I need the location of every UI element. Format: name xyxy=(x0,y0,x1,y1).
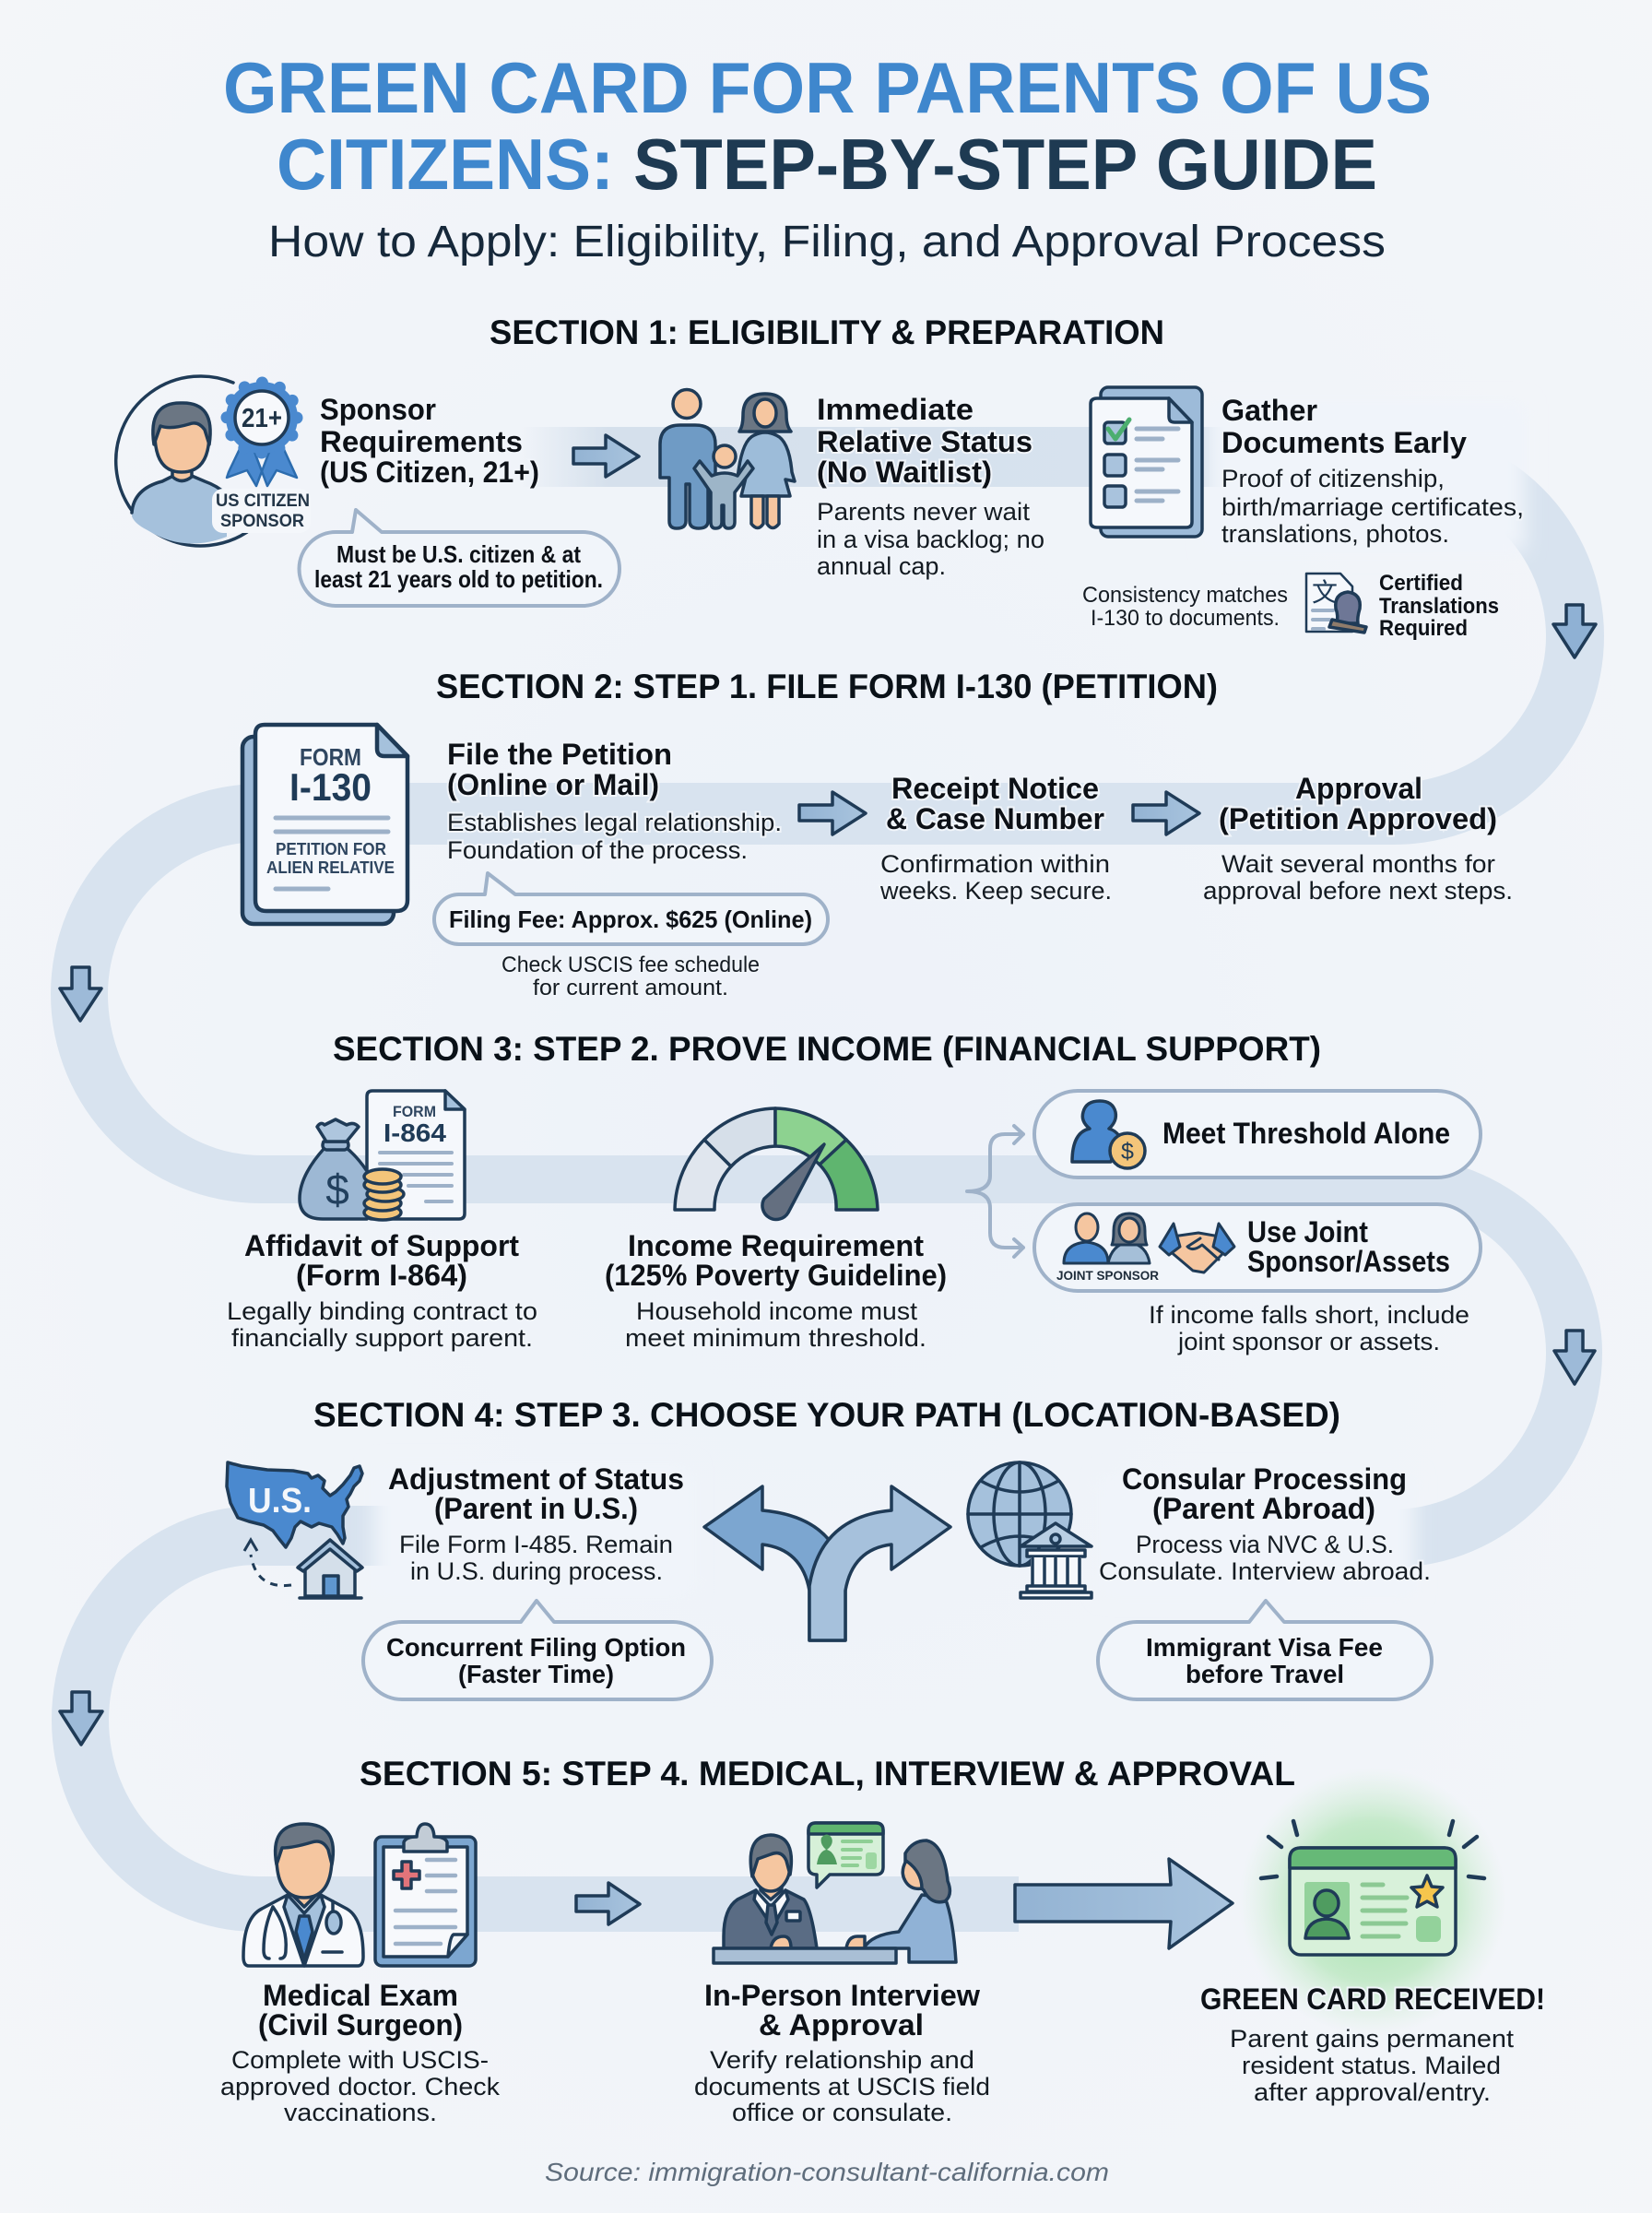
text: consular processing xyxy=(1122,1462,1407,1525)
callout: immigrant visa fee: Immigrant Visa Fee xyxy=(1146,1633,1383,1662)
text: file the petition: (Online or Mail) xyxy=(447,768,659,801)
text: file I-485 xyxy=(399,1531,673,1585)
pill: meet threshold alone: Meet Threshold Alone xyxy=(1162,1117,1450,1150)
text: gather documents xyxy=(1221,394,1467,459)
text: gather documents: Documents Early xyxy=(1221,426,1467,459)
text: certified translations: Required xyxy=(1379,616,1468,641)
text: documents list: birth/marriage certificates, xyxy=(1221,493,1524,521)
icon: US citizen sponsor xyxy=(116,376,298,546)
winding ribbon path xyxy=(51,404,1604,1932)
callout: filing fee xyxy=(434,873,828,944)
checklist lines xyxy=(1137,429,1178,501)
arrow: down left xyxy=(60,1692,102,1745)
text: file the petition: File the Petition xyxy=(447,738,672,771)
text: certified translations: Certified xyxy=(1379,571,1463,596)
pill: joint sponsor xyxy=(1034,1204,1481,1291)
text: binding contract: financially support parent. xyxy=(231,1324,533,1352)
callout: concurrent filing xyxy=(363,1601,712,1699)
icon: medical clipboard xyxy=(375,1824,476,1966)
text: adjustment of status: Adjustment of Status xyxy=(388,1462,684,1496)
icon: form I-864: I-864 xyxy=(384,1118,446,1147)
icon: US map and home: U.S. xyxy=(248,1482,312,1521)
text: confirmation: weeks. Keep secure. xyxy=(879,877,1112,905)
text: consular processing: (Parent Abroad) xyxy=(1152,1492,1375,1525)
text: in-person interview: & Approval xyxy=(759,2008,924,2041)
text: file I-485: File Form I-485. Remain xyxy=(399,1531,673,1558)
heading: section 2: SECTION 2: STEP 1. FILE FORM I-130 (PETITION) xyxy=(436,668,1218,705)
title: GREEN CARD FOR PARENTS OF US xyxy=(223,47,1432,128)
text: confirmation: Confirmation within xyxy=(880,850,1110,878)
text: medical exam: Medical Exam xyxy=(263,1979,458,2012)
text: binding contract xyxy=(227,1297,537,1352)
text: adjustment of status: (Parent in U.S.) xyxy=(434,1492,638,1525)
text: consistency note: Consistency matches xyxy=(1082,583,1288,608)
text: wait for approval: Wait several months for xyxy=(1221,850,1495,878)
pill: meet threshold alone: $ xyxy=(1121,1139,1134,1165)
arrow xyxy=(1133,792,1199,834)
text: fee schedule note xyxy=(502,953,760,1000)
big arrow xyxy=(1015,1859,1233,1948)
arrow xyxy=(573,435,639,477)
text: interview description xyxy=(694,2046,990,2126)
text: approval: (Petition Approved) xyxy=(1219,802,1497,835)
text: NVC process xyxy=(1099,1531,1431,1585)
text: sponsor requirements xyxy=(320,393,539,489)
text: medical description: Complete with USCIS- xyxy=(231,2046,489,2074)
label: US citizen sponsor: US CITIZEN xyxy=(216,491,310,511)
text: medical exam xyxy=(258,1979,463,2041)
icon: form I-864: FORM xyxy=(393,1103,436,1120)
icon: translation stamp: 文 xyxy=(1312,578,1338,607)
text: fee schedule note: for current amount. xyxy=(533,976,728,1000)
icon: translation stamp xyxy=(1306,574,1366,633)
callout: sponsor age: Must be U.S. citizen & at xyxy=(336,540,581,568)
label: US citizen sponsor xyxy=(212,489,311,533)
text: receipt notice xyxy=(886,772,1104,835)
callout: immigrant visa fee: before Travel xyxy=(1186,1660,1344,1688)
icon: form I-130 xyxy=(242,725,407,924)
text: no visa backlog: in a visa backlog; no xyxy=(817,526,1044,553)
text: file I-485: in U.S. during process. xyxy=(410,1557,663,1585)
text: immediate relative status: (No Waitlist) xyxy=(817,456,992,489)
text: no visa backlog xyxy=(817,498,1044,580)
text: approval xyxy=(1219,772,1497,835)
text: medical description xyxy=(220,2046,501,2126)
icon: family xyxy=(660,389,795,528)
text: green card received: GREEN CARD RECEIVED! xyxy=(1200,1982,1545,2016)
icon: form I-130: I-130 xyxy=(289,765,372,809)
icon: doctor xyxy=(243,1824,363,1966)
text: permanent resident: after approval/entry. xyxy=(1254,2078,1491,2106)
icon: interview scene xyxy=(714,1823,956,1963)
badge text: 21+: 21+ xyxy=(242,404,282,433)
text: immediate relative status: Immediate xyxy=(817,393,974,426)
text: affidavit of support: Affidavit of Support xyxy=(244,1229,519,1262)
text: joint sponsor note xyxy=(1149,1301,1469,1355)
title xyxy=(223,47,1432,205)
text: medical description: vaccinations. xyxy=(284,2099,437,2126)
text: medical description: approved doctor. Check xyxy=(220,2073,501,2101)
heading: section 4: SECTION 4: STEP 3. CHOOSE YOUR PATH (LOCATION-BASED) xyxy=(313,1396,1340,1434)
arrow: down left xyxy=(60,967,101,1021)
icon: fork arrow xyxy=(704,1486,950,1640)
text: binding contract: Legally binding contract to xyxy=(227,1297,537,1325)
text: certified translations xyxy=(1379,571,1499,641)
icon: form I-130: ALIEN RELATIVE xyxy=(266,858,395,877)
icon: form I-130: PETITION FOR xyxy=(276,840,386,858)
text: in-person interview xyxy=(704,1979,980,2041)
text: approval: Approval xyxy=(1295,772,1422,805)
pill: joint sponsor: Sponsor/Assets xyxy=(1247,1245,1450,1278)
callout: concurrent filing: Concurrent Filing Option xyxy=(386,1633,686,1662)
text: permanent resident: resident status. Mailed xyxy=(1242,2052,1501,2079)
label: US citizen sponsor: SPONSOR xyxy=(220,512,304,531)
text: household income: Household income must xyxy=(636,1297,918,1325)
text: establishes relationship: Foundation of the process. xyxy=(447,836,748,864)
text: confirmation xyxy=(879,850,1112,905)
icon: form I-130: FORM xyxy=(300,743,361,771)
text: sponsor requirements: Requirements xyxy=(320,425,523,458)
callout: filing fee: Filing Fee: Approx. $625 (Online) xyxy=(449,905,812,933)
heading: section 1: SECTION 1: ELIGIBILITY & PREPARATION xyxy=(490,314,1164,351)
text: gather documents: Gather xyxy=(1221,394,1317,427)
text: interview description: office or consulate. xyxy=(732,2099,952,2126)
text: receipt notice: & Case Number xyxy=(886,802,1104,835)
gauge chart xyxy=(675,1108,878,1220)
text: joint sponsor note: joint sponsor or assets. xyxy=(1177,1328,1440,1355)
text: permanent resident: Parent gains permanent xyxy=(1230,2025,1515,2053)
text: documents list: translations, photos. xyxy=(1221,520,1449,548)
callout: immigrant visa fee xyxy=(1098,1601,1432,1699)
text: household income: meet minimum threshold. xyxy=(625,1324,926,1352)
title: CITIZENS: xyxy=(277,124,614,205)
text: receipt notice: Receipt Notice xyxy=(891,772,1099,805)
icon: US map and home xyxy=(227,1462,362,1598)
text: permanent resident xyxy=(1230,2025,1515,2106)
text: consistency note xyxy=(1082,583,1288,631)
icon: form I-864 xyxy=(367,1091,465,1219)
icon: globe and consulate xyxy=(968,1462,1092,1598)
icon: green card with glow xyxy=(1239,1768,1506,2035)
text: certified translations: Translations xyxy=(1379,594,1499,619)
callout: sponsor age: least 21 years old to petition. xyxy=(314,565,603,593)
text: no visa backlog: annual cap. xyxy=(817,552,946,580)
text: immediate relative status: Relative Status xyxy=(817,425,1032,458)
text: no visa backlog: Parents never wait xyxy=(817,498,1031,526)
text: affidavit of support xyxy=(244,1229,519,1292)
text: consular processing: Consular Processing xyxy=(1122,1462,1407,1496)
text: interview description: documents at USCIS field xyxy=(694,2073,990,2101)
pill: meet threshold alone xyxy=(1034,1091,1481,1178)
text: NVC process: Consulate. Interview abroad. xyxy=(1099,1557,1431,1585)
text: consistency note: I-130 to documents. xyxy=(1091,606,1280,631)
text: household income xyxy=(625,1297,926,1352)
text: documents list xyxy=(1221,465,1524,548)
subtitle: How to Apply: Eligibility, Filing, and Approval Process xyxy=(268,218,1386,266)
dollar sign: $ xyxy=(325,1166,349,1213)
title: STEP-BY-STEP GUIDE xyxy=(633,124,1377,205)
text: income requirement xyxy=(605,1229,947,1292)
text: immediate relative status xyxy=(817,393,1032,489)
text: income requirement: (125% Poverty Guideline) xyxy=(605,1259,947,1292)
text: interview description: Verify relationship and xyxy=(710,2046,974,2074)
text: establishes relationship: Establishes legal relationship. xyxy=(447,809,782,836)
text: documents list: Proof of citizenship, xyxy=(1221,465,1445,492)
arrow: down right xyxy=(1553,605,1596,657)
text: wait for approval: approval before next steps. xyxy=(1203,877,1513,905)
icon: money bag and coins xyxy=(300,1119,404,1220)
text: sponsor requirements: (US Citizen, 21+) xyxy=(320,456,539,489)
text: sponsor requirements: Sponsor xyxy=(320,393,436,426)
text: in-person interview: In-Person Interview xyxy=(704,1979,980,2012)
text: wait for approval xyxy=(1203,850,1513,905)
text: joint sponsor note: If income falls short, include xyxy=(1149,1301,1469,1329)
arrow: down right xyxy=(1554,1331,1595,1384)
text: establishes relationship xyxy=(447,809,782,864)
callout: concurrent filing: (Faster Time) xyxy=(458,1660,614,1688)
heading: section 3: SECTION 3: STEP 2. PROVE INCOME (FINANCIAL SUPPORT) xyxy=(333,1030,1321,1068)
text: income requirement: Income Requirement xyxy=(628,1229,924,1262)
text: NVC process: Process via NVC & U.S. xyxy=(1136,1531,1394,1558)
text: medical exam: (Civil Surgeon) xyxy=(258,2008,463,2041)
icon: document checklist xyxy=(1091,387,1202,537)
text: affidavit of support: (Form I-864) xyxy=(296,1259,467,1292)
text: fee schedule note: Check USCIS fee schedule xyxy=(502,953,760,977)
pill: joint sponsor: JOINT SPONSOR xyxy=(1056,1268,1159,1283)
arrow xyxy=(576,1883,640,1924)
pill: joint sponsor: Use Joint xyxy=(1247,1215,1368,1249)
heading: section 5: SECTION 5: STEP 4. MEDICAL, INTERVIEW & APPROVAL xyxy=(360,1755,1295,1793)
callout: sponsor age xyxy=(300,510,620,606)
text: file the petition xyxy=(447,738,672,801)
text: adjustment of status xyxy=(388,1462,684,1525)
source: Source: immigration-consultant-california.com xyxy=(545,2158,1109,2186)
arrow xyxy=(799,792,866,834)
brace connector xyxy=(967,1126,1023,1257)
